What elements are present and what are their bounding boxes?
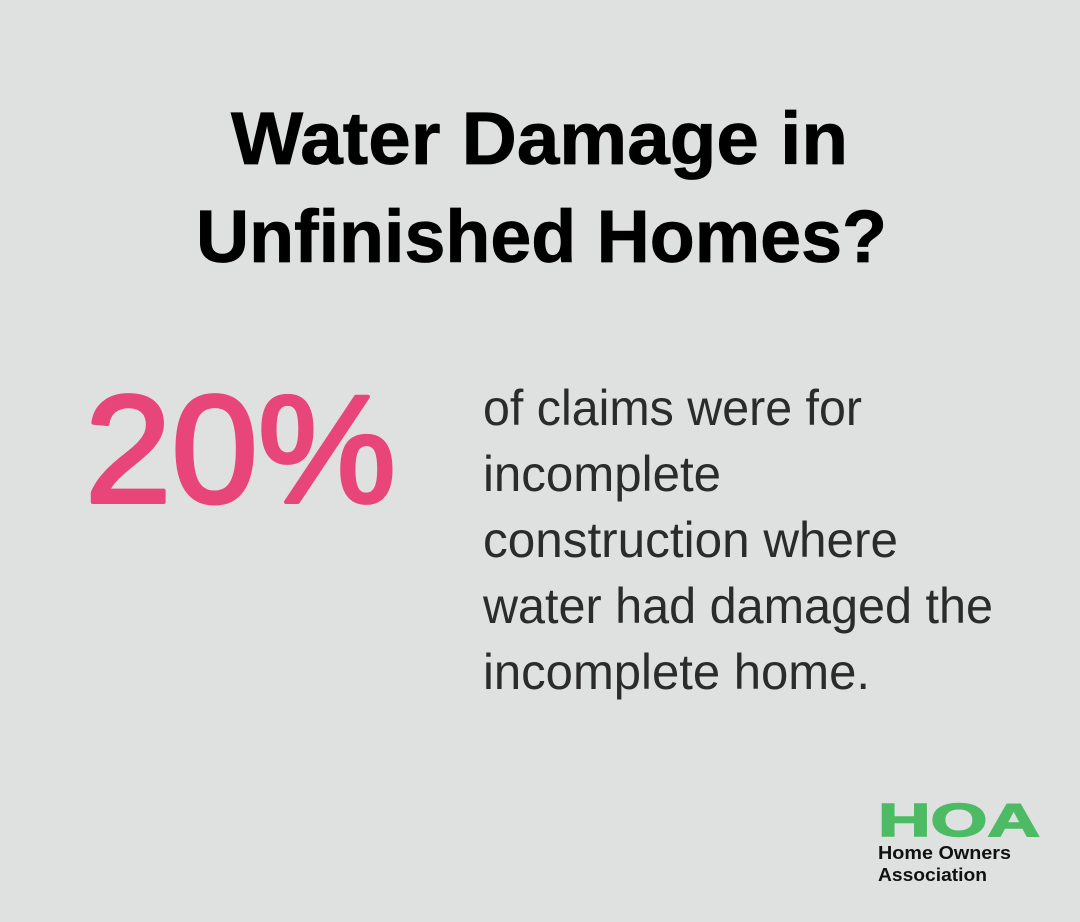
- logo wordmark: Association: [878, 864, 987, 885]
- statistic description: water had damaged the: [482, 578, 993, 634]
- statistic description: incomplete: [483, 446, 721, 502]
- logo mark: HOA: HOA: [878, 794, 1040, 846]
- statistic description: [482, 380, 993, 700]
- title: Water Damage in: [231, 97, 848, 180]
- statistic description: incomplete home.: [483, 644, 870, 700]
- statistic description: construction where: [483, 512, 898, 568]
- big statistic: 20%: 20%: [85, 364, 396, 535]
- logo wordmark: [878, 842, 1011, 885]
- statistic description: of claims were for: [483, 380, 862, 436]
- title: [196, 97, 887, 278]
- title: Unfinished Homes?: [196, 195, 887, 278]
- logo: HOA Home Owners Association: [878, 794, 1040, 885]
- logo wordmark: Home Owners: [878, 842, 1011, 863]
